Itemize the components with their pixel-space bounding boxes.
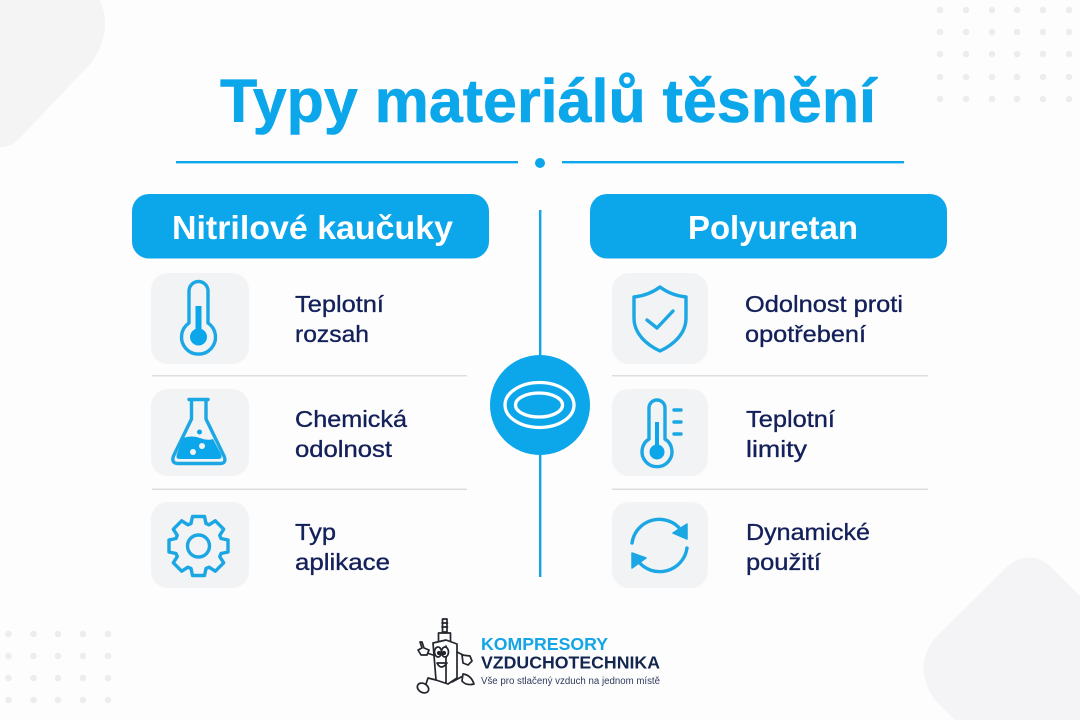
dot pattern top right [937,7,1072,102]
center vertical line [539,210,541,577]
heading: Nitrilové kaučuky [132,194,489,258]
center circle with gasket icon [490,355,590,455]
tile: flask icon [151,389,249,476]
brand name: KOMPRESORY [481,634,608,654]
label: Teplotní rozsah: rozsah [295,321,369,347]
decorative corner shape top left [0,0,105,147]
label: Teplotní limity: limity [746,436,807,462]
label: Teplotní rozsah [295,291,385,347]
heading: Nitrilové kaučuky: Nitrilové kaučuky [172,209,454,246]
label: Chemická odolnost: Chemická [295,406,408,432]
logo: Kompresory Vzduchotechnika [416,619,661,695]
decorative corner shape bottom right [924,557,1080,720]
panel: Nitrilové kaučuky [132,194,489,588]
panel: Polyuretan [590,194,947,588]
label: Dynamické použití [746,519,870,575]
label: Teplotní rozsah: Teplotní [295,291,385,317]
label: Typ aplikace: Typ [295,519,336,545]
title: Typy materiálů těsnění [220,67,878,135]
tile: thermometer icon [151,273,249,364]
title divider with dot [176,158,904,168]
label: Typ aplikace: aplikace [295,549,390,575]
icon: running compressor mascot [416,619,474,695]
label: Odolnost proti opotřebení: opotřebení [745,321,867,347]
tile: thermometer with scale icon [612,389,708,476]
dot pattern bottom left [5,631,111,703]
label: Teplotní limity [746,406,836,462]
tile: gear icon [151,502,249,588]
label: Typ aplikace [295,519,390,575]
label: Chemická odolnost [295,406,408,462]
label: Teplotní limity: Teplotní [746,406,836,432]
label: Dynamické použití: použití [746,549,821,575]
logo: Kompresory Vzduchotechnika: VZDUCHOTECHNIKA [481,652,660,672]
tile: shield icon [612,273,708,364]
label: Chemická odolnost: odolnost [295,436,393,462]
tagline: Vše pro stlačený vzduch na jednom místě [481,676,661,687]
heading: Polyuretan [590,194,947,258]
heading: Polyuretan: Polyuretan [688,209,858,246]
label: Odolnost proti opotřebení [745,291,903,347]
tile: refresh arrows icon [612,502,708,588]
label: Odolnost proti opotřebení: Odolnost proti [745,291,903,317]
label: Dynamické použití: Dynamické [746,519,870,545]
